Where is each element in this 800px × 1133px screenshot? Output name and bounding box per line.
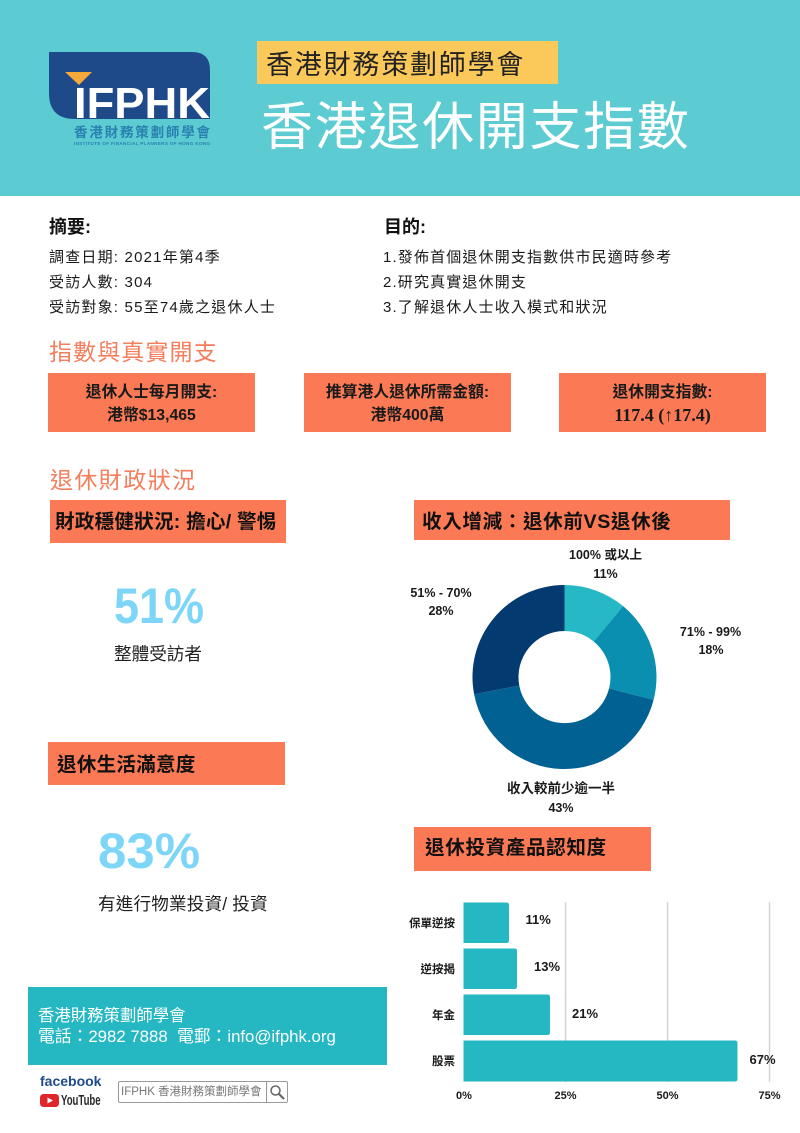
summary line: respondents: 受訪人數: 304 — [49, 274, 153, 291]
organisation name: 香港財務策劃師學會 — [38, 1007, 186, 1025]
slice: less than half — [474, 686, 654, 769]
slice: 100% or more — [564, 585, 623, 642]
objectives block — [383, 217, 672, 316]
bars — [464, 902, 738, 1082]
summary heading: 摘要: — [49, 217, 91, 237]
logo mark: INSTITUTE OF FINANCIAL PLANNERS OF HONG KONG — [74, 141, 210, 146]
big stat: 83%: 83% — [98, 823, 200, 879]
heading: investment product awareness: 退休投資產品認知度 — [425, 837, 607, 859]
contact panel — [28, 987, 387, 1065]
axis labels: 75% — [758, 1090, 781, 1102]
heading: investment product awareness — [414, 827, 651, 871]
main title: 香港退休開支指數 — [261, 99, 691, 157]
search box — [118, 1081, 288, 1103]
bar category labels: 逆按揭 — [420, 962, 455, 976]
phone and email: 電話：2982 7888 電郵：info@ifphk.org — [38, 1027, 336, 1046]
stat box: index: 退休開支指數: — [612, 384, 713, 401]
stat box: required amount: 港幣400萬 — [371, 407, 444, 424]
section heading: retirement finances: 退休財政狀況 — [50, 467, 196, 493]
donut labels: 28% — [428, 604, 454, 618]
heading: financial health: 財政穩健狀況: 擔心/ 警惕 — [55, 511, 277, 533]
logo mark — [49, 52, 210, 146]
organisation name tag — [257, 41, 558, 84]
heading: retirement satisfaction — [48, 742, 285, 785]
bar values — [526, 912, 776, 1067]
donut labels: 43% — [548, 801, 574, 815]
youtube wordmark: YouTube — [61, 1092, 101, 1109]
slice: 51-70% — [472, 585, 564, 694]
stat box: index: 117.4 (↑17.4) — [614, 405, 711, 425]
slice: 71-99% — [594, 606, 656, 700]
donut labels: 18% — [698, 643, 724, 657]
logo — [49, 52, 210, 146]
logo mark: 香港財務策劃師學會 — [74, 124, 210, 140]
summary line: date: 調查日期: 2021年第4季 — [49, 249, 221, 266]
axis labels: 25% — [554, 1090, 577, 1102]
stat box: monthly spending — [48, 373, 255, 432]
objective 1: 1.發佈首個退休開支指數供市民適時參考 — [383, 249, 672, 266]
facebook wordmark: facebook — [40, 1073, 101, 1089]
heading: financial health — [50, 500, 286, 543]
logo mark: IFPHK — [74, 79, 210, 128]
stat box: index — [559, 373, 766, 432]
caption: all respondents: 整體受訪者 — [114, 644, 202, 664]
donut labels: 71% - 99% — [680, 625, 741, 639]
objective 2: 2.研究真實退休開支 — [383, 274, 527, 291]
donut labels: 100% 或以上 — [569, 547, 642, 562]
summary block — [49, 217, 276, 316]
bar values: 11% — [526, 912, 551, 927]
donut labels — [410, 547, 741, 815]
bar category labels: 股票 — [432, 1055, 455, 1068]
organisation name tag: 香港財務策劃師學會 — [266, 50, 525, 80]
header band — [0, 0, 800, 196]
search text: IFPHK 香港財務策劃師學會 — [121, 1086, 262, 1098]
bar values: 67% — [750, 1052, 776, 1067]
heading: income change — [414, 500, 730, 540]
section heading: index and real spending: 指數與真實開支 — [49, 339, 218, 365]
bar category labels: 年金 — [432, 1008, 455, 1022]
stat box: required amount — [304, 373, 511, 432]
objective 3: 3.了解退休人士收入模式和狀況 — [383, 299, 608, 316]
bar chart — [409, 902, 781, 1102]
donut labels: 51% - 70% — [410, 586, 472, 600]
caption: property or investment: 有進行物業投資/ 投資 — [98, 894, 268, 914]
search icon — [266, 1082, 285, 1102]
axis labels — [456, 1090, 781, 1102]
axis labels: 0% — [456, 1090, 472, 1102]
bar values: 21% — [572, 1006, 598, 1021]
stat box: required amount: 推算港人退休所需金額: — [326, 384, 489, 401]
youtube logo — [40, 1092, 101, 1109]
bar category labels — [409, 916, 455, 1068]
objectives heading: 目的: — [384, 217, 426, 237]
bar values: 13% — [534, 959, 560, 974]
bar category labels: 保單逆按 — [409, 916, 455, 930]
donut labels: 收入較前少逾一半 — [507, 780, 615, 796]
big stat: 51%: 51% — [114, 578, 204, 634]
stat box: monthly spending: 港幣$13,465 — [107, 407, 196, 424]
donut labels: 11% — [593, 567, 618, 581]
play icon — [40, 1094, 59, 1107]
stat box: monthly spending: 退休人士每月開支: — [86, 384, 217, 401]
heading: income change: 收入增減：退休前VS退休後 — [422, 511, 671, 533]
summary line: subjects: 受訪對象: 55至74歲之退休人士 — [49, 299, 276, 316]
donut chart — [410, 547, 741, 815]
heading: retirement satisfaction: 退休生活滿意度 — [57, 754, 196, 776]
axis labels: 50% — [656, 1090, 679, 1102]
